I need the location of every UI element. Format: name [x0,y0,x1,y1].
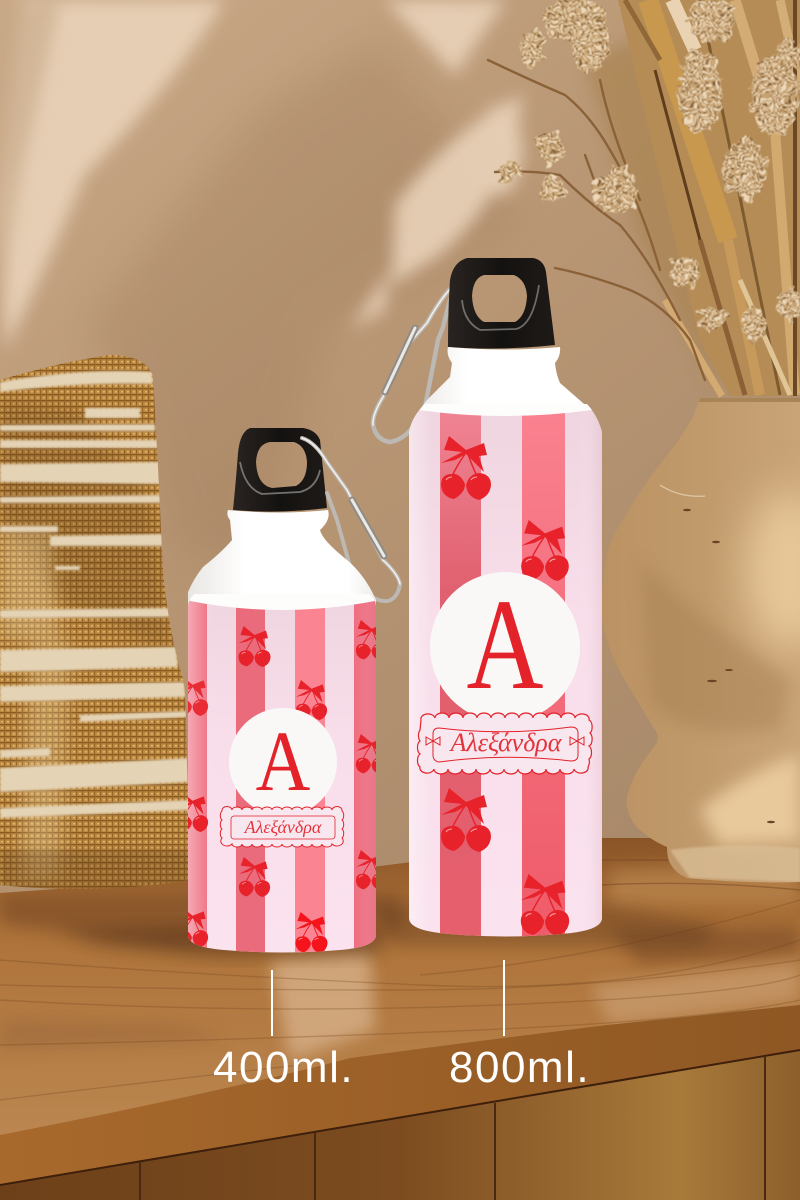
small bottle shoulder [188,510,376,612]
flower clusters [498,0,800,343]
branches [488,60,705,380]
large bottle name label: Αλεξάνδρα [449,728,563,757]
large bottle carabiner [373,277,463,442]
large bottle: 800ml [373,258,606,940]
small bottle name label: Αλεξάνδρα [244,817,322,837]
large bottle monogram circle [430,572,580,722]
small bottle: 400ml [177,428,400,960]
table top [0,838,800,1135]
stalk bundle [618,0,800,396]
small bottle cherries [188,620,376,952]
vase [602,398,800,882]
wall with shadows [0,0,800,900]
small bottle cap [233,428,327,512]
table front edge [0,1005,800,1185]
small bottle monogram circle: A [256,714,310,809]
size label: 400ml: 400ml. [213,1043,354,1092]
large bottle monogram circle: A [467,572,543,716]
small bottle name label [220,806,344,847]
wispy stalk mass [585,30,720,396]
small bottle body [188,594,376,952]
large bottle body [405,400,606,940]
large bottle cherries [441,436,569,936]
small bottle monogram circle [229,708,337,816]
large bottle name label [417,713,592,774]
small bottle shadow [60,925,380,958]
large bottle cap [448,258,555,349]
wooden table [0,838,800,1200]
pillow [0,355,190,900]
large bottle shadow [375,905,720,945]
large bottle shoulder [409,347,602,440]
dried flowers [488,0,800,396]
table front face [0,1050,800,1200]
size label: 800ml: 800ml. [449,1043,590,1092]
small bottle carabiner [302,438,400,601]
